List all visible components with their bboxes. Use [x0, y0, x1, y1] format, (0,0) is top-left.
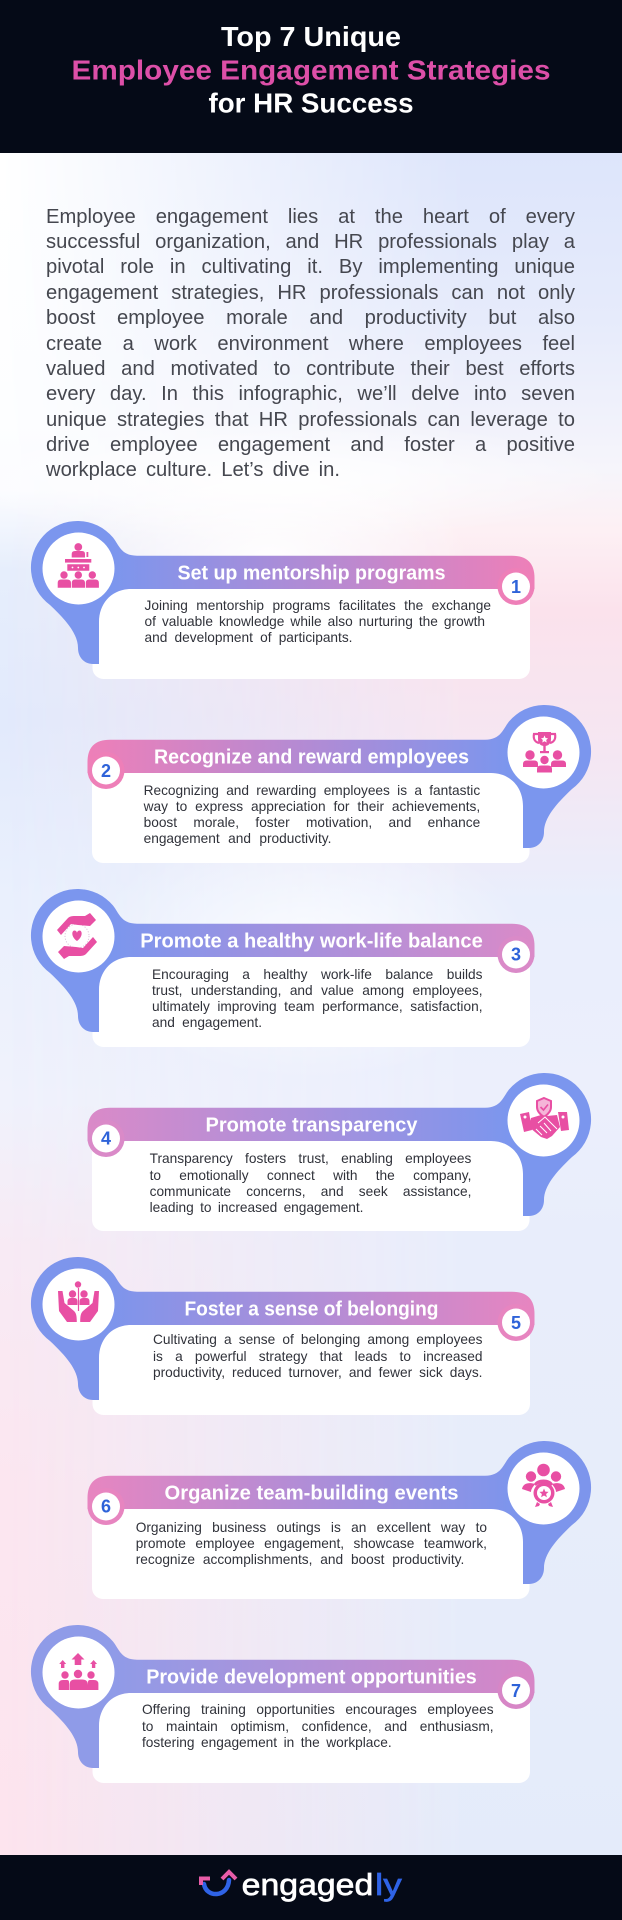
number badge: 2	[101, 761, 111, 781]
description: communicate concerns, and seek assistance,	[150, 1184, 471, 1199]
panel: strategy 3 work-life balance	[30, 889, 534, 1047]
description: productivity, reduced turnover, and fewer sick days.	[153, 1365, 482, 1380]
description	[136, 1520, 487, 1567]
number badge: 7	[511, 1681, 521, 1701]
heading: Provide development opportunities	[146, 1665, 477, 1688]
description	[150, 1151, 471, 1215]
title: Top 7 Unique	[221, 21, 401, 52]
heading: Foster a sense of belonging	[184, 1297, 438, 1320]
logo: engagedly: ly	[375, 1867, 402, 1902]
description: promote employee engagement, showcase teamwork,	[136, 1536, 487, 1551]
description: is a powerful strategy that leads to increased	[153, 1348, 482, 1364]
panel: strategy 2 recognition	[88, 705, 592, 863]
panel: strategy 4 transparency	[88, 1073, 592, 1231]
number badge: 1	[511, 577, 521, 597]
heading: Promote transparency	[206, 1113, 418, 1136]
description: Recognizing and rewarding employees is a fantastic	[144, 783, 480, 798]
description: fostering engagement in the workplace.	[142, 1735, 392, 1750]
number badge	[498, 1304, 534, 1341]
number badge: 6	[101, 1496, 111, 1516]
panel: strategy 1 mentorship	[30, 521, 534, 679]
description: way to express appreciation for their achievements,	[144, 799, 480, 814]
description	[144, 598, 491, 645]
logo: engagedly	[199, 1867, 402, 1902]
description: Transparency fosters trust, enabling employees	[150, 1151, 471, 1166]
heading: Promote a healthy work-life balance	[140, 929, 483, 952]
icon: team with rosette	[522, 1464, 565, 1507]
intro paragraph: drive employee engagement and foster a positive	[46, 434, 575, 456]
number badge: 4	[101, 1128, 111, 1148]
description: Encouraging a healthy work-life balance builds	[152, 967, 482, 982]
intro paragraph: Employee engagement lies at the heart of every	[46, 206, 575, 228]
footer band	[0, 1855, 622, 1920]
description: engagement and productivity.	[144, 831, 331, 846]
number badge: 3	[511, 944, 521, 964]
intro paragraph: create a work environment where employees feel	[46, 332, 575, 354]
logo: engagedly: engaged	[242, 1867, 373, 1902]
description: leading to increased engagement.	[150, 1200, 363, 1215]
panel: strategy 6 team building	[88, 1441, 592, 1599]
intro paragraph: workplace culture. Let’s dive in.	[46, 459, 340, 481]
intro paragraph: pivotal role in cultivating it. By implementing unique	[46, 256, 575, 278]
description: of valuable knowledge while also nurturing the growth	[144, 614, 485, 629]
intro paragraph: boost employee morale and productivity but also	[46, 307, 575, 329]
description: ultimately improving team performance, satisfaction,	[152, 999, 482, 1014]
description: to maintain optimism, confidence, and enthusiasm,	[142, 1718, 494, 1734]
description: trust, understanding, and value among employees,	[152, 983, 482, 998]
title	[72, 21, 550, 119]
icon: team with up arrows	[59, 1653, 98, 1690]
heading: Recognize and reward employees	[154, 745, 469, 768]
title band	[0, 0, 622, 153]
number badge	[88, 752, 124, 789]
description: Joining mentorship programs facilitates the exchange	[144, 598, 491, 613]
heading: Organize team-building events	[164, 1481, 458, 1504]
description: boost morale, foster motivation, and enhance	[144, 815, 480, 830]
description	[144, 783, 480, 846]
title: Employee Engagement Strategies	[72, 54, 550, 86]
icon: hands holding people	[58, 1281, 99, 1322]
icon: handshake with shield	[520, 1098, 569, 1139]
icon: trophy with team	[523, 732, 566, 772]
number badge	[498, 568, 534, 605]
description: and development of participants.	[144, 630, 352, 645]
intro paragraph: every day. In this infographic, we’ll delve into seven	[46, 383, 575, 405]
description: to emotionally connect with the company,	[150, 1168, 471, 1182]
number badge	[498, 1672, 534, 1709]
intro paragraph: valued and motivated to contribute their best efforts	[46, 358, 575, 380]
description	[153, 1332, 482, 1380]
number badge	[498, 936, 534, 973]
description: Organizing business outings is an excellent way to	[136, 1520, 487, 1535]
description: recognize accomplishments, and boost productivity.	[136, 1552, 464, 1567]
description	[152, 967, 482, 1030]
description: Cultivating a sense of belonging among employees	[153, 1332, 482, 1347]
title: for HR Success	[208, 88, 414, 119]
panel: strategy 7 development	[30, 1625, 534, 1783]
intro paragraph: successful organization, and HR professionals play a	[46, 231, 575, 253]
panel: strategy 5 belonging	[30, 1257, 534, 1415]
icon: hands around heart	[57, 913, 97, 959]
intro paragraph	[46, 206, 575, 481]
description	[142, 1702, 494, 1750]
intro paragraph: engagement strategies, HR professionals can not only	[46, 282, 575, 304]
icon: mentor at lectern with audience	[58, 543, 99, 588]
description: Offering training opportunities encourages employees	[142, 1702, 494, 1717]
number badge	[88, 1120, 124, 1157]
description: and engagement.	[152, 1015, 262, 1030]
heading: Set up mentorship programs	[178, 561, 446, 584]
intro paragraph: unique strategies that HR professionals can leverage to	[46, 408, 575, 430]
number badge	[88, 1488, 124, 1525]
number badge: 5	[511, 1313, 521, 1333]
